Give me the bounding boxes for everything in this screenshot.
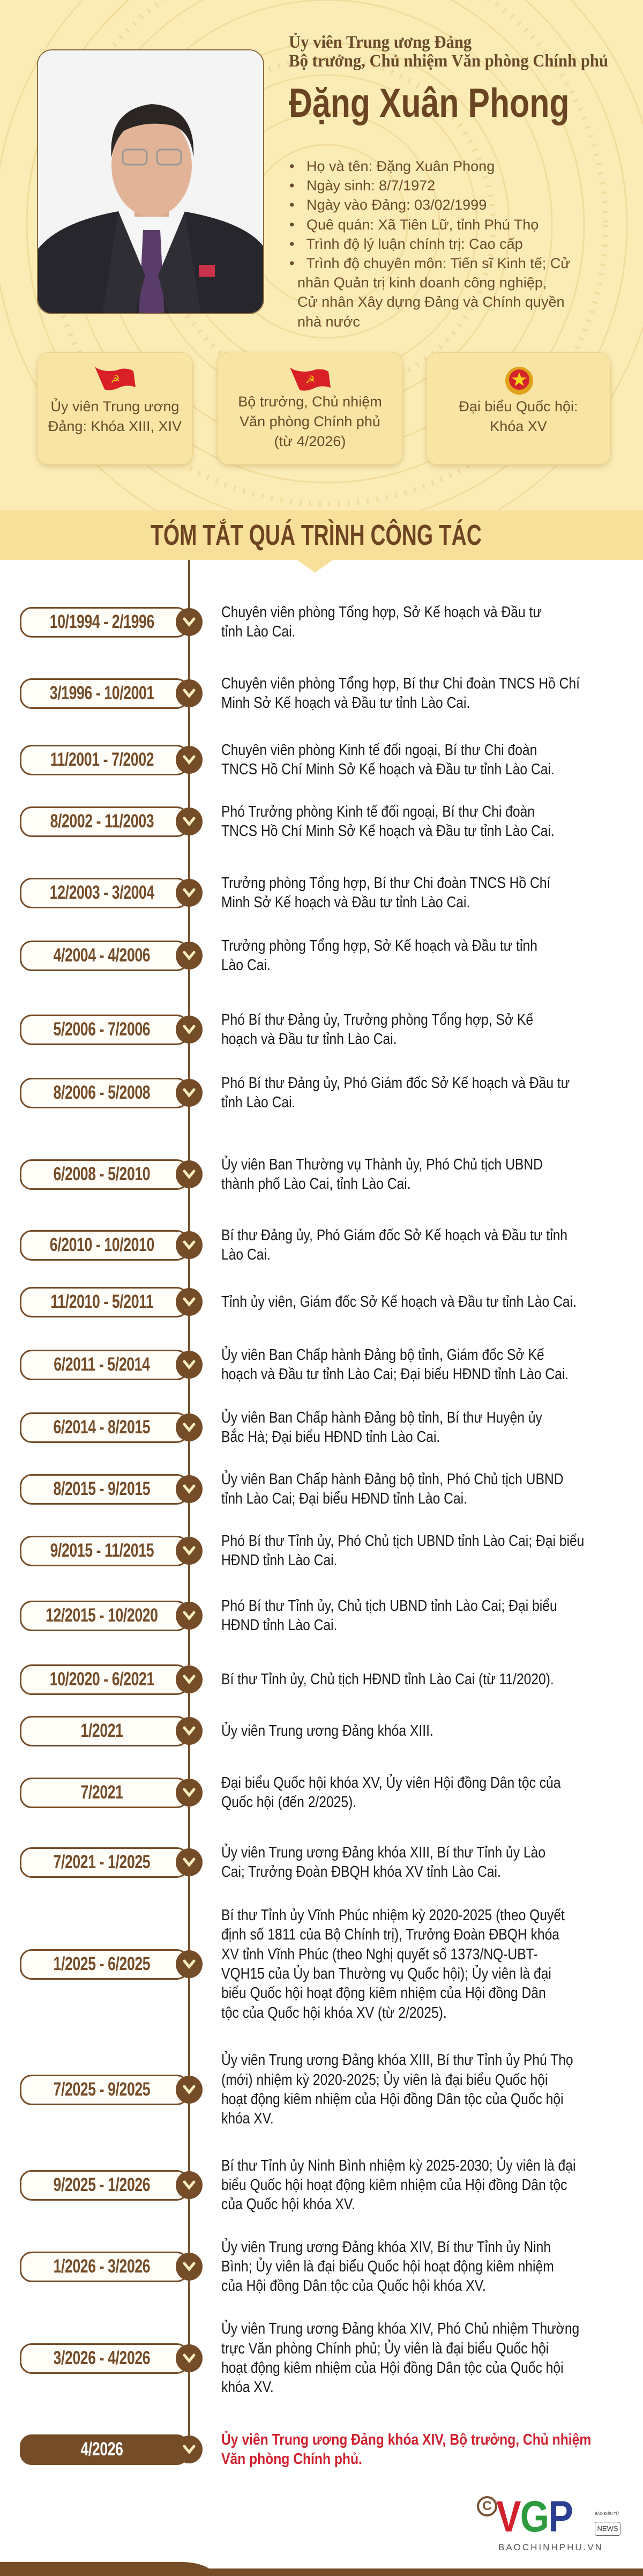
entry 1/2026: của Hội đồng Dân tộc của Quốc hội khóa XV. <box>221 2277 486 2294</box>
card: national assembly: Khóa XV <box>490 418 547 434</box>
entry 11/2010 <box>20 1287 577 1317</box>
entry 6/2008: thành phố Lào Cai, tỉnh Lào Cai. <box>221 1175 411 1193</box>
bio bullets: nhà nước <box>297 314 360 330</box>
entry 7/2021 - 1/2025: 7/2021 - 1/2025 <box>54 1852 150 1872</box>
logo: VGP: BAOCHINHPHU.VN <box>498 2542 603 2552</box>
entry 5/2006: hoạch và Đầu tư tỉnh Lào Cai. <box>221 1031 397 1048</box>
entry 7/2021: Đại biểu Quốc hội khóa XV, Ủy viên Hội đồng Dân tộc của <box>221 1774 561 1792</box>
entry 1/2021: Ủy viên Trung ương Đảng khóa XIII. <box>221 1722 433 1739</box>
icon: party flag: ☭ <box>110 373 120 386</box>
entry 9/2025: của Quốc hội khóa XV. <box>221 2196 355 2213</box>
entry 7/2021: Quốc hội (đến 2/2025). <box>221 1794 356 1811</box>
entry 5/2006: 5/2006 - 7/2006 <box>54 1019 150 1040</box>
entry 1/2025: Bí thư Tỉnh ủy Vĩnh Phúc nhiệm kỳ 2020-2025 (theo Quyết <box>221 1907 565 1924</box>
bio bullets: • Quê quán: Xã Tiên Lữ, tỉnh Phú Thọ <box>289 217 539 233</box>
arrow: heading pointer <box>296 559 334 573</box>
title: name: Đặng Xuân Phong <box>289 80 570 126</box>
entry 6/2014: Bắc Hà; Đại biểu HĐND tỉnh Lào Cai. <box>221 1428 440 1446</box>
entry 8/2006: 8/2006 - 5/2008 <box>54 1082 150 1103</box>
icon: party flag <box>95 367 136 390</box>
chevron icons on timeline <box>183 618 195 2454</box>
entry 1/2021 <box>20 1716 433 1746</box>
entry 11/2001 <box>20 742 555 778</box>
icon: national emblem <box>505 367 533 395</box>
entry 1/2026: Ủy viên Trung ương Đảng khóa XIV, Bí thư Tỉnh ủy Ninh <box>221 2239 551 2256</box>
bio bullets: • Ngày vào Đảng: 03/02/1999 <box>289 197 487 213</box>
entry 10/1994: Chuyên viên phòng Tổng hợp, Sở Kế hoạch và Đầu tư <box>221 604 542 621</box>
logo: VGP <box>477 2492 620 2552</box>
icon: party flag <box>290 367 331 391</box>
entry 9/2025 <box>20 2157 575 2213</box>
timeline line <box>188 560 190 2437</box>
entry 8/2002: Phó Trưởng phòng Kinh tế đối ngoại, Bí thư Chi đoàn <box>221 803 535 820</box>
entry 12/2003: 12/2003 - 3/2004 <box>49 882 154 903</box>
entry 7/2025: khóa XV. <box>221 2110 274 2127</box>
entry 5/2006: Phó Bí thư Đảng ủy, Trưởng phòng Tổng hợp, Sở Kế <box>221 1011 533 1028</box>
entry 7/2025: Ủy viên Trung ương Đảng khóa XIII, Bí thư Tỉnh ủy Phú Thọ <box>221 2052 573 2069</box>
entry 10/2020: Bí thư Tỉnh ủy, Chủ tịch HĐND tỉnh Lào Cai (từ 11/2020). <box>221 1671 554 1688</box>
entry 8/2006: tỉnh Lào Cai. <box>221 1094 295 1111</box>
entry 12/2003: Trưởng phòng Tổng hợp, Bí thư Chi đoàn TNCS Hồ Chí <box>221 875 550 892</box>
entry 7/2021 - 1/2025: Cai; Trưởng Đoàn ĐBQH khóa XV tỉnh Lào Cai. <box>221 1863 501 1881</box>
entry 9/2025: biểu Quốc hội hoạt động kiêm nhiệm của Hội đồng Dân tộc <box>221 2177 567 2194</box>
entry 7/2021 - 1/2025: Ủy viên Trung ương Đảng khóa XIII, Bí thư Tỉnh ủy Lào <box>221 1844 545 1861</box>
entry 6/2008 <box>20 1156 543 1193</box>
entry 7/2021: 7/2021 <box>80 1782 123 1803</box>
entry 7/2025 <box>20 2051 573 2127</box>
entry 10/1994: 10/1994 - 2/1996 <box>49 611 154 632</box>
title: position: Ủy viên Trung ương Đảng <box>289 33 472 52</box>
entry 12/2015: Phó Bí thư Tỉnh ủy, Chủ tịch UBND tỉnh Lào Cai; Đại biểu <box>221 1597 557 1615</box>
entry 8/2015: 8/2015 - 9/2015 <box>54 1478 150 1499</box>
title: position: Bộ trưởng, Chủ nhiệm Văn phòng Chính phủ <box>289 51 608 71</box>
entry 6/2008: 6/2008 - 5/2010 <box>54 1164 150 1185</box>
entry 7/2021 <box>20 1774 561 1811</box>
bio bullets: • Ngày sinh: 8/7/1972 <box>289 177 435 194</box>
card: national assembly: Đại biểu Quốc hội: <box>459 398 578 414</box>
entry 9/2025: 9/2025 - 1/2026 <box>54 2174 150 2195</box>
entry 8/2015: tỉnh Lào Cai; Đại biểu HĐND tỉnh Lào Cai. <box>221 1490 467 1507</box>
entry 10/2020 <box>20 1664 554 1695</box>
bio bullets: nhân Quản trị kinh doanh công nghiệp, <box>297 275 547 291</box>
entry 9/2015: HĐND tỉnh Lào Cai. <box>221 1552 337 1569</box>
entry 6/2010: 6/2010 - 10/2010 <box>49 1234 154 1255</box>
entry 1/2025: định số 1811 của Bộ Chính trị), Trưởng Đoàn ĐBQH khóa <box>221 1926 559 1943</box>
footer band <box>0 2562 643 2576</box>
entry 6/2011: Ủy viên Ban Chấp hành Đảng bộ tỉnh, Giám đốc Sở Kế <box>221 1346 544 1364</box>
entry 1/2025: XV tỉnh Vĩnh Phúc (theo Nghị quyết số 1373/NQ-UBT- <box>221 1946 538 1963</box>
title: position <box>289 33 608 71</box>
entry 7/2025: 7/2025 - 9/2025 <box>54 2079 150 2100</box>
entry 4/2004 <box>20 937 537 974</box>
top section background <box>0 0 643 510</box>
entry 4/2026 highlighted: Văn phòng Chính phủ. <box>221 2451 362 2468</box>
entry 7/2021 - 1/2025 <box>20 1844 545 1881</box>
entry 1/2025: biểu Quốc hội hoạt động kiêm nhiệm của Hội đồng Dân <box>221 1985 546 2002</box>
entry 4/2004: 4/2004 - 4/2006 <box>54 945 150 966</box>
entry 12/2003: Minh Sở Kế hoạch và Đầu tư tỉnh Lào Cai. <box>221 894 470 911</box>
entry 6/2010: Bí thư Đảng ủy, Phó Giám đốc Sở Kế hoạch và Đầu tư tỉnh <box>221 1227 567 1244</box>
timeline entries <box>20 604 591 2468</box>
entry 10/2020: 10/2020 - 6/2021 <box>49 1669 154 1690</box>
entry 3/1996 <box>20 675 580 712</box>
entry 11/2001: 11/2001 - 7/2002 <box>50 749 154 770</box>
entry 5/2006 <box>20 1011 533 1048</box>
bio bullets: • Trình độ lý luận chính trị: Cao cấp <box>289 236 523 252</box>
logo: VGP: BÁO ĐIỆN TỬ <box>595 2512 619 2516</box>
entry 8/2002: TNCS Hồ Chí Minh Sở Kế hoạch và Đầu tư tỉnh Lào Cai. <box>221 823 555 840</box>
entry 1/2025: tộc của Quốc hội khóa XV (từ 2/2025). <box>221 2004 447 2022</box>
entry 7/2025: (mới) nhiệm kỳ 2020-2025; Ủy viên là đại biểu Quốc hội <box>221 2071 548 2089</box>
bio bullets: Cử nhân Xây dựng Đảng và Chính quyền <box>297 294 564 310</box>
entry 11/2010: 11/2010 - 5/2011 <box>50 1291 153 1312</box>
entry 6/2011 <box>20 1346 569 1383</box>
logo: VGP: NEWS <box>597 2525 618 2533</box>
entry 9/2025: Bí thư Tỉnh ủy Ninh Bình nhiệm kỳ 2025-2030; Ủy viên là đại <box>221 2157 575 2174</box>
entry 6/2010: Lào Cai. <box>221 1246 271 1263</box>
entry 11/2001: Chuyên viên phòng Kinh tế đối ngoại, Bí thư Chi đoàn <box>221 742 537 759</box>
card: national assembly <box>426 352 611 465</box>
entry 4/2026 highlighted <box>20 2431 591 2468</box>
entry 3/1996: Chuyên viên phòng Tổng hợp, Bí thư Chi đoàn TNCS Hồ Chí <box>221 675 580 692</box>
entry 6/2010 <box>20 1227 567 1263</box>
entry 8/2006 <box>20 1075 570 1111</box>
entry 8/2015: Ủy viên Ban Chấp hành Đảng bộ tỉnh, Phó Chủ tịch UBND <box>221 1471 564 1488</box>
entry 1/2025: 1/2025 - 6/2025 <box>54 1953 150 1974</box>
entry 6/2011: 6/2011 - 5/2014 <box>54 1354 150 1375</box>
logo: VGP: C <box>482 2499 492 2513</box>
section heading band: TÓM TẮT QUÁ TRÌNH CÔNG TÁC <box>151 519 482 551</box>
entry 4/2004: Lào Cai. <box>221 957 271 974</box>
entry 6/2014: 6/2014 - 8/2015 <box>54 1417 150 1438</box>
card: minister: Văn phòng Chính phủ <box>240 413 380 430</box>
entry 4/2004: Trưởng phòng Tổng hợp, Sở Kế hoạch và Đầu tư tỉnh <box>221 937 537 954</box>
entry 8/2006: Phó Bí thư Đảng ủy, Phó Giám đốc Sở Kế hoạch và Đầu tư <box>221 1075 570 1092</box>
entry 1/2026 <box>20 2238 554 2294</box>
icon: party flag: ☭ <box>305 373 315 386</box>
section heading band <box>0 510 643 560</box>
entry 3/2026: 3/2026 - 4/2026 <box>54 2348 150 2368</box>
bio bullets <box>289 158 570 330</box>
entry 8/2015 <box>20 1470 564 1507</box>
card: party committee <box>37 352 193 465</box>
entry 3/2026: Ủy viên Trung ương Đảng khóa XIV, Phó Chủ nhiệm Thường <box>221 2320 579 2337</box>
entry 11/2010: Tỉnh ủy viên, Giám đốc Sở Kế hoạch và Đầu tư tỉnh Lào Cai. <box>221 1293 577 1311</box>
entry 1/2026: 1/2026 - 3/2026 <box>54 2256 150 2277</box>
entry 3/1996: 3/1996 - 10/2001 <box>49 683 154 704</box>
entry 6/2014: Ủy viên Ban Chấp hành Đảng bộ tỉnh, Bí thư Huyện ủy <box>221 1409 542 1426</box>
entry 10/1994 <box>20 604 542 640</box>
entry 9/2015: 9/2015 - 11/2015 <box>50 1540 154 1561</box>
card: minister: (từ 4/2026) <box>274 433 346 449</box>
entry 7/2025: hoạt động kiêm nhiệm của Hội đồng Dân tộc của Quốc hội <box>221 2091 564 2108</box>
card: minister <box>217 352 403 465</box>
logo: VGP: VGP <box>496 2492 572 2541</box>
entry 12/2015 <box>20 1597 557 1634</box>
entry 8/2002: 8/2002 - 11/2003 <box>50 811 154 832</box>
entry 1/2025: VQH15 của Ủy ban Thường vụ Quốc hội); Ủy viên là đại <box>221 1965 551 1982</box>
entry 3/2026: hoạt động kiêm nhiệm của Hội đồng Dân tộc của Quốc hội <box>221 2359 564 2377</box>
photo <box>37 49 264 314</box>
card: party committee: Ủy viên Trung ương <box>51 398 179 414</box>
entry 11/2001: TNCS Hồ Chí Minh Sở Kế hoạch và Đầu tư tỉnh Lào Cai. <box>221 761 555 778</box>
entry 6/2011: hoạch và Đầu tư tỉnh Lào Cai; Đại biểu HĐND tỉnh Lào Cai. <box>221 1366 569 1383</box>
entry 4/2026 highlighted: Ủy viên Trung ương Đảng khóa XIV, Bộ trưởng, Chủ nhiệm <box>221 2431 591 2448</box>
bio bullets: • Họ và tên: Đặng Xuân Phong <box>289 158 495 174</box>
entry 12/2003 <box>20 875 551 911</box>
entry 1/2025 <box>20 1907 565 2022</box>
entry 6/2008: Ủy viên Ban Thường vụ Thành ủy, Phó Chủ tịch UBND <box>221 1156 543 1173</box>
entry 6/2014 <box>20 1409 542 1446</box>
card: party committee: Đảng: Khóa XIII, XIV <box>48 418 182 434</box>
bio bullets: • Trình độ chuyên môn: Tiến sĩ Kinh tế; Cử <box>289 255 570 271</box>
entry 12/2015: 12/2015 - 10/2020 <box>46 1605 158 1626</box>
entry 3/1996: Minh Sở Kế hoạch và Đầu tư tỉnh Lào Cai. <box>221 694 470 712</box>
entry 9/2015: Phó Bí thư Tỉnh ủy, Phó Chủ tịch UBND tỉnh Lào Cai; Đại biểu <box>221 1533 584 1550</box>
entry 8/2002 <box>20 803 555 840</box>
entry 3/2026: khóa XV. <box>221 2379 274 2396</box>
entry 1/2021: 1/2021 <box>80 1720 123 1741</box>
entry 3/2026: trực Văn phòng Chính phủ; Ủy viên là đại biểu Quốc hội <box>221 2340 549 2357</box>
entry 4/2026 highlighted: 4/2026 <box>80 2439 123 2460</box>
entry 9/2015 <box>20 1533 584 1569</box>
entry 10/1994: tỉnh Lào Cai. <box>221 623 295 640</box>
entry 12/2015: HĐND tỉnh Lào Cai. <box>221 1617 337 1634</box>
entry 1/2026: Bình; Ủy viên là đại biểu Quốc hội hoạt động kiêm nhiệm <box>221 2258 554 2275</box>
card: minister: Bộ trưởng, Chủ nhiệm <box>238 394 382 410</box>
entry 3/2026 <box>20 2320 579 2396</box>
